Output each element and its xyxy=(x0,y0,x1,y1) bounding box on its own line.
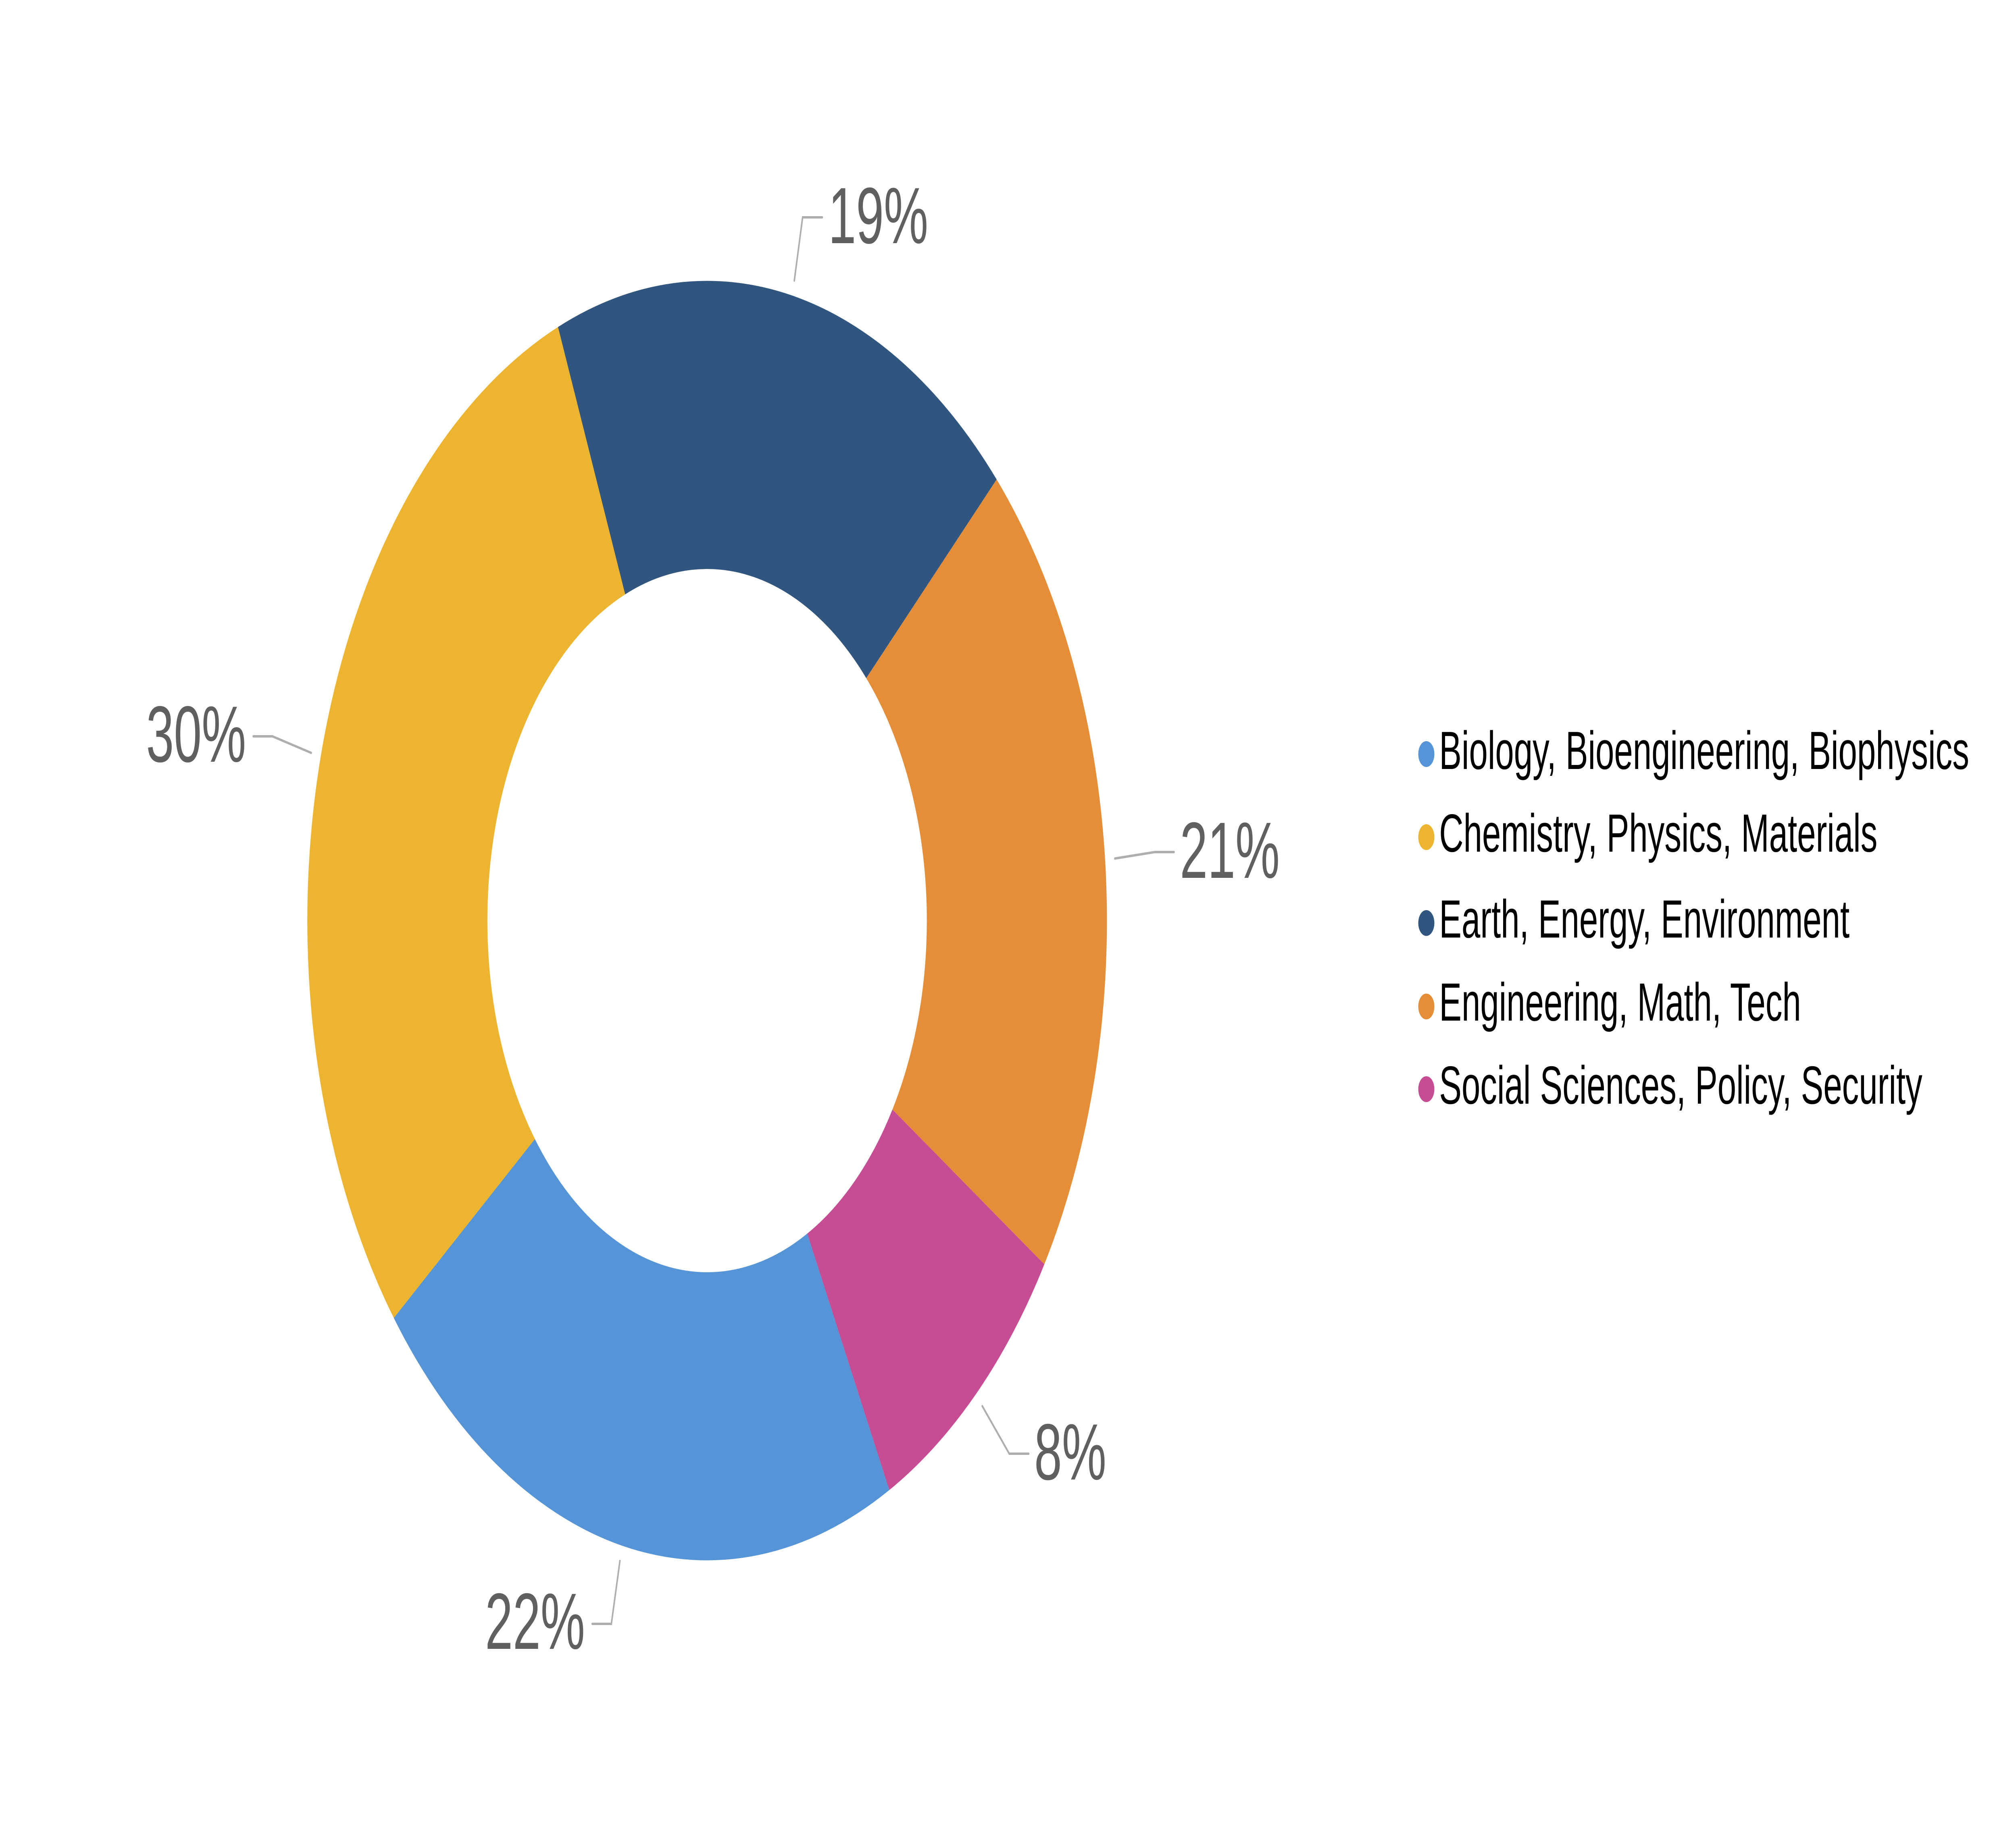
legend xyxy=(1418,720,1969,1115)
data label: 21% xyxy=(1115,806,1280,895)
data label: 22% xyxy=(485,1561,620,1666)
donut chart xyxy=(307,281,1107,1560)
data label: 19% xyxy=(794,171,928,281)
legend item: Earth, Energy, Environment: Earth, Energy, Environment xyxy=(1439,889,1849,949)
data label: 22%: 22% xyxy=(485,1577,585,1666)
data label: 19%: 19% xyxy=(828,171,928,260)
segment: Social Sciences, Policy, Security 8% xyxy=(807,1110,1044,1490)
legend item: Chemistry, Physics, Materials: Chemistry, Physics, Materials xyxy=(1439,803,1877,863)
legend item: Biology, Bioengineering, Biophysics: Biology, Bioengineering, Biophysics xyxy=(1439,720,1969,781)
segment: Engineering, Math, Tech 21% xyxy=(866,479,1107,1264)
segment: Biology, Bioengineering, Biophysics 22% xyxy=(394,1139,889,1560)
data label: 30% xyxy=(146,690,311,779)
legend item: Social Sciences, Policy, Security: Social Sciences, Policy, Security xyxy=(1439,1055,1922,1115)
segment: Earth, Energy, Environment 19% xyxy=(558,281,997,678)
segment: Chemistry, Physics, Materials 30% xyxy=(307,327,625,1318)
legend item: Engineering, Math, Tech: Engineering, Math, Tech xyxy=(1439,972,1801,1032)
data label: 30%: 30% xyxy=(146,690,246,779)
data label: 8%: 8% xyxy=(1034,1407,1106,1496)
data label: 8% xyxy=(982,1406,1106,1496)
data label: 21%: 21% xyxy=(1180,806,1280,895)
